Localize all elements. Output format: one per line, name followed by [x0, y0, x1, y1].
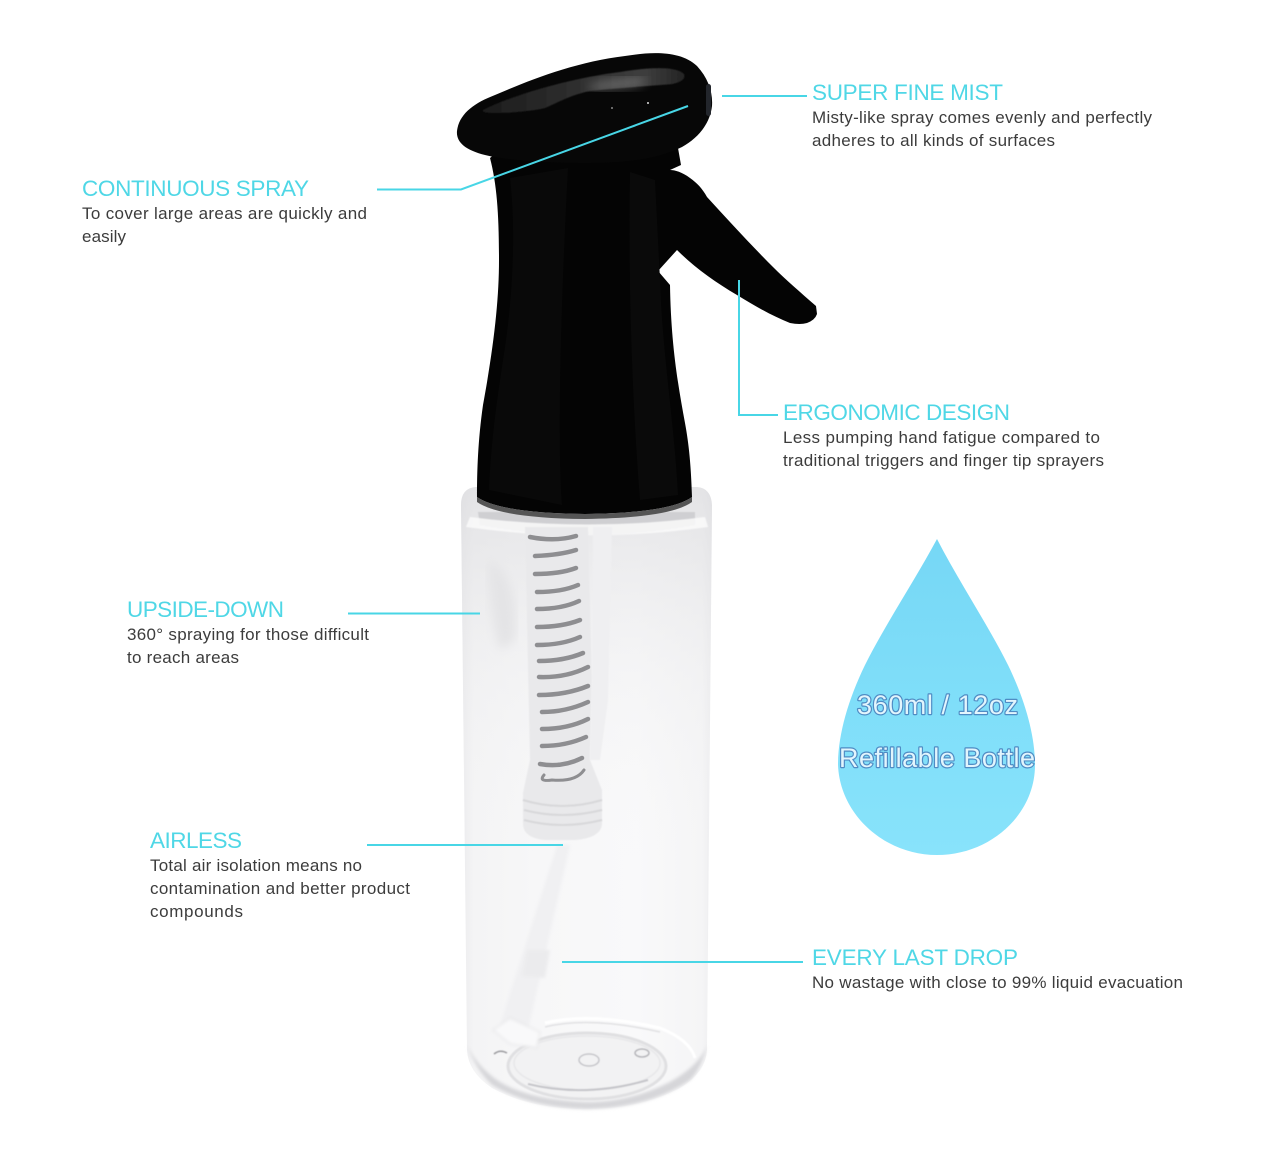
cap [457, 53, 712, 163]
callout: continuous spray: CONTINUOUS SPRAY [82, 176, 309, 201]
spray bottle product photo [457, 53, 817, 1109]
black spray head [457, 53, 817, 519]
callout: super fine mist [812, 80, 1152, 150]
callout: airless: AIRLESS [150, 828, 242, 853]
callout: ergonomic design: ERGONOMIC DESIGN [783, 400, 1010, 425]
callout: upside-down: to reach areas [127, 648, 239, 667]
callout: every last drop [812, 945, 1183, 992]
refillable text: Refillable Bottle [839, 743, 1035, 773]
callout lines [348, 96, 807, 962]
callout: every last drop: No wastage with close to 99% liquid evacuation [812, 973, 1183, 992]
dip tube [493, 845, 570, 1048]
callout: ergonomic design: Less pumping hand fatigue compared to [783, 428, 1100, 447]
callout: super fine mist: adheres to all kinds of surfaces [812, 131, 1055, 150]
cap gloss [483, 68, 684, 113]
callout: ergonomic design [783, 400, 1104, 470]
callout: upside-down: 360° spraying for those difficult [127, 625, 369, 644]
callout: airless: contamination and better product [150, 879, 410, 898]
bottle base [494, 1019, 695, 1099]
neck and trigger [477, 148, 817, 514]
callout: super fine mist: SUPER FINE MIST [812, 80, 1003, 105]
clear bottle body [461, 487, 712, 1109]
callout: upside-down [127, 597, 369, 667]
callout: airless: compounds [150, 902, 243, 921]
callout: continuous spray: easily [82, 227, 126, 246]
spring tube [523, 527, 612, 840]
water drop badge [838, 539, 1035, 855]
callout: every last drop: EVERY LAST DROP [812, 945, 1018, 970]
callout: ergonomic design: traditional triggers and finger tip sprayers [783, 451, 1104, 470]
cap button and specks [611, 84, 711, 116]
icon: water drop [838, 539, 1035, 855]
callout: super fine mist: Misty-like spray comes evenly and perfectly [812, 108, 1152, 127]
capacity text: 360ml / 12oz [857, 690, 1018, 720]
spring coils [530, 536, 588, 780]
callout: continuous spray: To cover large areas are quickly and [82, 204, 367, 223]
callout: upside-down: UPSIDE-DOWN [127, 597, 284, 622]
callout: airless: Total air isolation means no [150, 856, 362, 875]
neck shading [489, 168, 568, 505]
callout: airless [150, 828, 410, 921]
callout: continuous spray [82, 176, 367, 246]
